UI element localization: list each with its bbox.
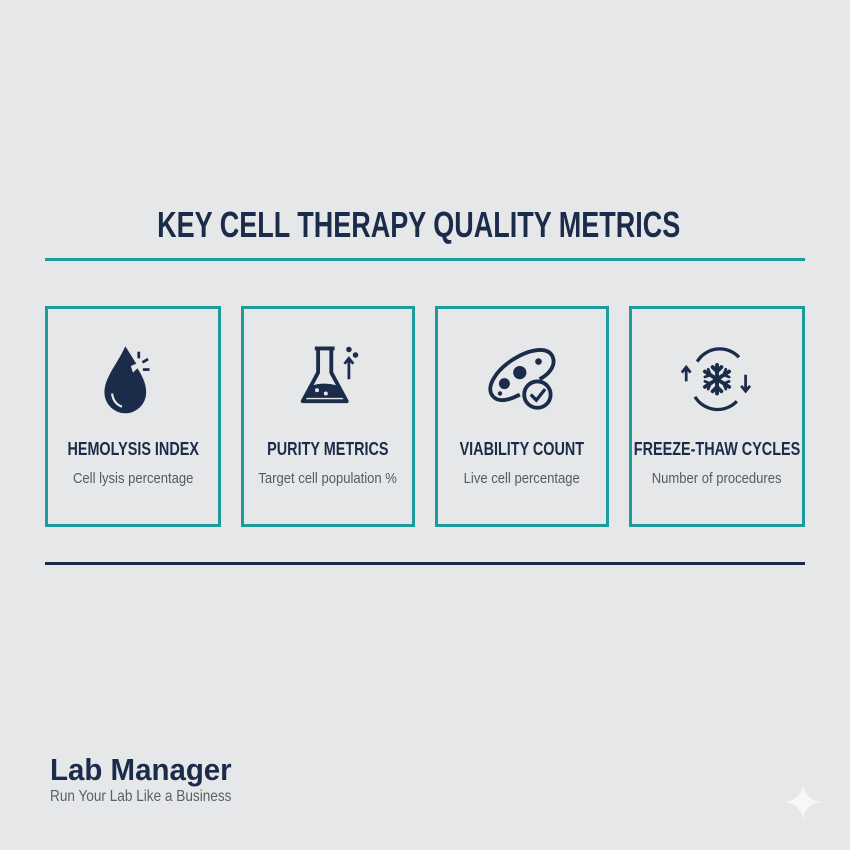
icon: flask bbox=[300, 346, 358, 404]
panel: viability count: Live cell percentage bbox=[464, 470, 580, 487]
icon: cell with check bbox=[488, 348, 556, 410]
panel: purity metrics: Target cell population % bbox=[259, 470, 397, 487]
panel: freeze-thaw cycles: Number of procedures bbox=[652, 470, 782, 487]
panel: purity metrics bbox=[241, 306, 415, 527]
logo: Lab Manager bbox=[50, 752, 232, 805]
panel: freeze-thaw cycles: FREEZE-THAW CYCLES bbox=[634, 439, 800, 459]
title: KEY CELL THERAPY QUALITY METRICS bbox=[157, 204, 681, 245]
logo: Lab Manager: Lab Manager bbox=[50, 752, 232, 787]
icon: blood drop bbox=[104, 346, 150, 414]
panel: hemolysis index bbox=[45, 306, 221, 527]
panel: viability count: VIABILITY COUNT bbox=[460, 439, 584, 459]
icon: sparkle bbox=[786, 786, 820, 818]
logo: Lab Manager: Run Your Lab Like a Business bbox=[50, 788, 231, 805]
panel: hemolysis index: HEMOLYSIS INDEX bbox=[67, 439, 199, 459]
panel: viability count bbox=[435, 306, 609, 527]
panel: freeze-thaw cycles bbox=[629, 306, 805, 527]
panel: purity metrics: PURITY METRICS bbox=[267, 439, 389, 459]
icon: snowflake cycle bbox=[680, 347, 751, 412]
panel: hemolysis index: Cell lysis percentage bbox=[73, 470, 193, 487]
